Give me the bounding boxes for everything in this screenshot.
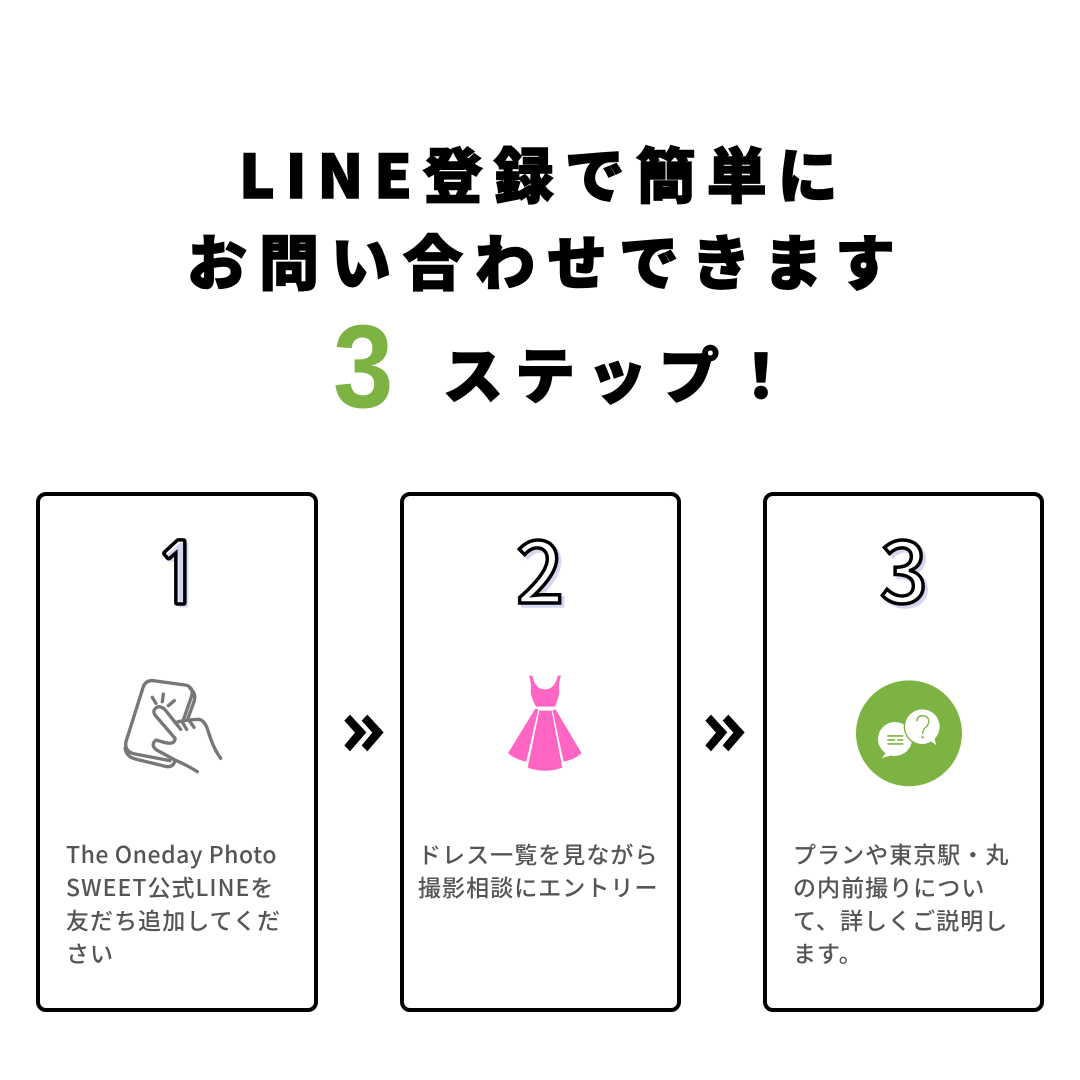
step 1 text: さい [66, 935, 114, 969]
icon: hand tapping phone [125, 681, 221, 772]
panel: step 3 [763, 492, 1044, 1012]
step 3 text: ます。 [793, 935, 863, 969]
number 3: 3 [880, 507, 928, 628]
step 2 text: ドレス一覧を見ながら [418, 836, 658, 870]
title line 1: LINE登録で簡単に [239, 129, 849, 216]
step 1 text [66, 836, 281, 969]
number 2: 2 [519, 510, 567, 631]
step 1 text: 友だち追加してくだ [66, 902, 281, 936]
number 3: 3 [883, 510, 931, 631]
icon: pink dress [508, 676, 582, 771]
step 1 text: The Oneday Photo [66, 836, 277, 870]
title line 2: お問い合わせできます [187, 216, 907, 303]
step 2 text: 撮影相談にエントリー [418, 869, 658, 903]
panel: step 1 [36, 492, 318, 1012]
arrow: step 2 to 3 [705, 715, 745, 751]
number 2: 2 [516, 507, 564, 628]
step 3 text: プランや東京駅・丸 [793, 836, 1009, 870]
step 1 text: SWEET公式LINEを [66, 869, 274, 903]
big green number 3: 3 [333, 301, 393, 433]
step 3 text [793, 836, 1009, 969]
title line 3: 3 steps [333, 301, 803, 433]
steps text: ステップ！ [443, 329, 803, 416]
number 1: 1 [153, 533, 204, 617]
icon: chat bubbles on green circle [856, 680, 962, 786]
arrow: step 1 to 2 [344, 715, 384, 751]
step 3 text: の内前撮りについ [793, 869, 985, 903]
panel: step 2 [400, 492, 681, 1012]
step 2 text [418, 836, 658, 903]
title [187, 129, 907, 433]
number 1: 1 [156, 536, 207, 620]
step 3 text: て、詳しくご説明し [793, 902, 1008, 936]
